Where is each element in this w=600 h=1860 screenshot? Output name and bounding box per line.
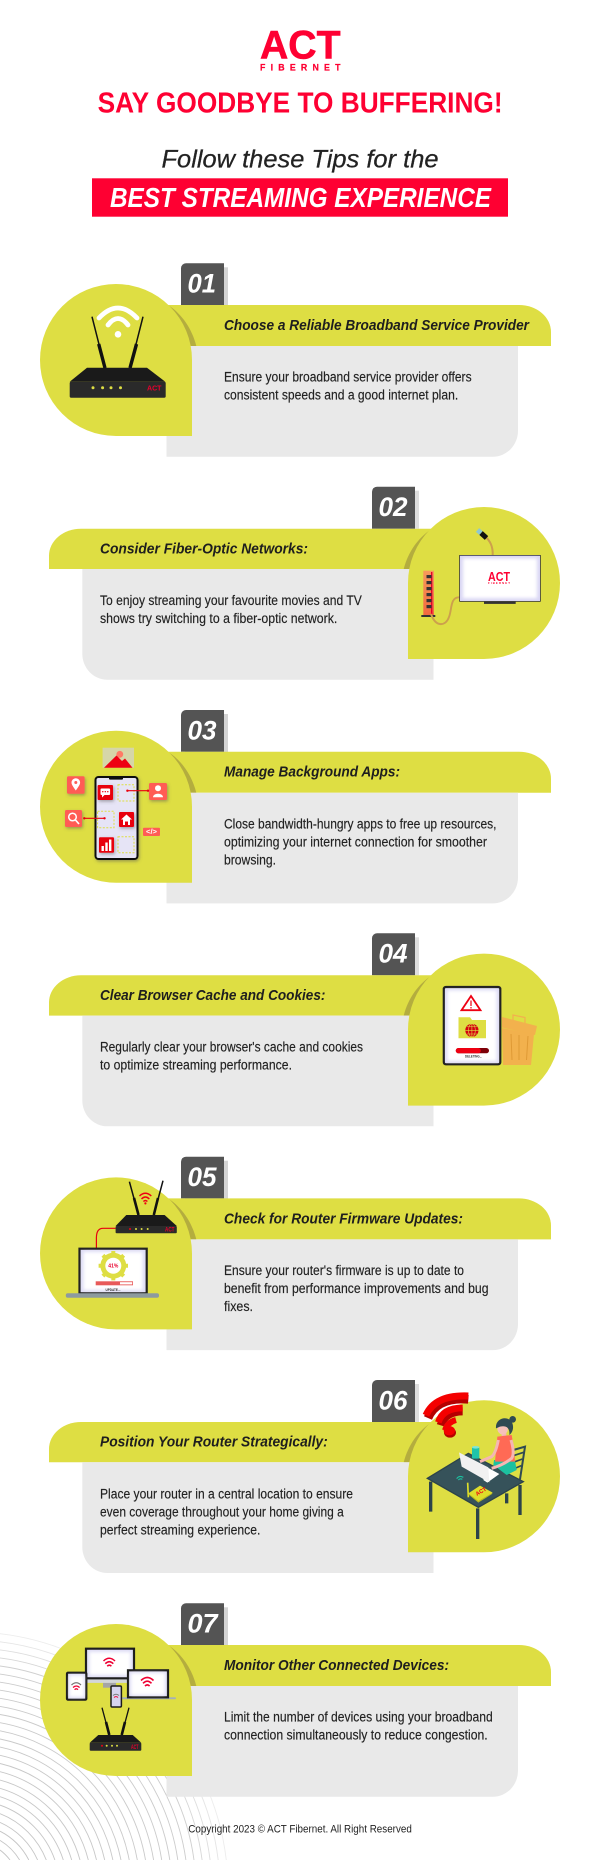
body panel 05: Ensure your router's firmware is up to date to bbox=[224, 1263, 464, 1278]
logo: ACT Fibernet: ACT bbox=[260, 23, 340, 67]
icon circle 01 bbox=[40, 284, 192, 436]
heading bar 02: Consider Fiber-Optic Networks: bbox=[100, 540, 308, 557]
icon: router updating laptop: UPDATE... bbox=[106, 1287, 120, 1292]
number badge 03 bbox=[181, 710, 224, 752]
icon circle 03 bbox=[40, 731, 192, 883]
icon circle 04 bbox=[408, 954, 560, 1106]
number badge 01: 01 bbox=[188, 269, 216, 299]
panel: tip 06 bbox=[49, 1380, 560, 1573]
heading bar 03 bbox=[150, 752, 551, 793]
heading bar 04 bbox=[49, 975, 450, 1016]
number badge 06: 06 bbox=[378, 1385, 408, 1415]
icon circle 05 bbox=[40, 1177, 192, 1329]
icon: tablet and trash can bbox=[444, 987, 537, 1065]
body panel 03 bbox=[166, 793, 518, 903]
heading bar 07 bbox=[150, 1645, 551, 1686]
icon: phone with apps bbox=[65, 748, 167, 859]
icon: woman at table with wifi bbox=[426, 1396, 525, 1539]
body panel 03: optimizing your internet connection for smoother bbox=[224, 834, 487, 849]
icon: router updating laptop: ACT bbox=[165, 1228, 175, 1234]
body panel 01 bbox=[166, 346, 518, 457]
body panel 07: Limit the number of devices using your broadband bbox=[224, 1710, 493, 1725]
number badge 02: 02 bbox=[378, 492, 408, 522]
icon: router with wifi bbox=[70, 308, 166, 398]
icon: router with wifi: ACT bbox=[147, 384, 162, 393]
number badge 05 bbox=[181, 1157, 224, 1198]
icon: connected devices and router bbox=[67, 1649, 176, 1751]
icon circle 02 bbox=[408, 507, 560, 659]
heading bar 06 bbox=[49, 1422, 450, 1462]
number badge 02 bbox=[372, 487, 415, 529]
panel: tip 07 bbox=[40, 1603, 551, 1797]
banner: best streaming experience: BEST STREAMING EXPERIENCE bbox=[110, 182, 492, 213]
subtitle: Follow these Tips for the bbox=[162, 146, 438, 174]
body panel 05 bbox=[166, 1239, 518, 1350]
body panel 06 bbox=[82, 1462, 434, 1573]
heading bar 01: Choose a Reliable Broadband Service Provider bbox=[224, 317, 530, 334]
body panel 04: to optimize streaming performance. bbox=[100, 1058, 292, 1073]
copyright footer: Copyright 2023 © ACT Fibernet. All Right Reserved bbox=[188, 1824, 412, 1836]
icon: connected devices and router: ACT bbox=[131, 1745, 139, 1751]
number badge 04: 04 bbox=[378, 939, 408, 969]
body panel 02: To enjoy streaming your favourite movies and TV bbox=[100, 593, 362, 608]
icon circle 07 bbox=[40, 1624, 192, 1776]
icon: phone with apps: </> bbox=[146, 829, 157, 836]
icon: TV and fiber cable: FIBERNET bbox=[488, 581, 510, 585]
body panel 06: perfect streaming experience. bbox=[100, 1522, 260, 1537]
title: SAY GOODBYE TO BUFFERING! bbox=[98, 87, 503, 119]
panel: tip 02 bbox=[49, 487, 560, 680]
number badge 07: 07 bbox=[188, 1609, 219, 1639]
heading bar 07: Monitor Other Connected Devices: bbox=[224, 1657, 449, 1674]
icon: TV and fiber cable: ACT bbox=[488, 570, 510, 584]
heading bar 05: Check for Router Firmware Updates: bbox=[224, 1210, 463, 1227]
panel: tip 03 bbox=[40, 710, 551, 903]
icon: router updating laptop bbox=[66, 1181, 177, 1298]
icon: woman at table with wifi: ACT bbox=[475, 1486, 488, 1498]
body panel 05: benefit from performance improvements and bug bbox=[224, 1281, 488, 1296]
body panel 02: shows try switching to a fiber-optic network. bbox=[100, 611, 337, 626]
heading bar 03: Manage Background Apps: bbox=[224, 764, 400, 781]
panel: tip 04 bbox=[49, 933, 560, 1126]
heading bar 05 bbox=[150, 1198, 551, 1239]
icon: TV and fiber cable bbox=[421, 530, 541, 624]
body panel 06: Place your router in a central location to ensure bbox=[100, 1486, 353, 1501]
panel: tip 05 bbox=[40, 1157, 551, 1350]
body panel 06: even coverage throughout your home giving a bbox=[100, 1504, 344, 1519]
icon: tablet and trash can: DELETING... bbox=[465, 1054, 482, 1058]
body panel 03: Close bandwidth-hungry apps to free up resources, bbox=[224, 816, 496, 831]
heading bar 06: Position Your Router Strategically: bbox=[100, 1434, 328, 1451]
icon circle 06 bbox=[408, 1400, 560, 1552]
number badge 04 bbox=[372, 933, 415, 975]
body panel 07: connection simultaneously to reduce congestion. bbox=[224, 1728, 488, 1743]
number badge 06 bbox=[372, 1380, 415, 1422]
number badge 05: 05 bbox=[188, 1162, 217, 1192]
body panel 05: fixes. bbox=[224, 1299, 253, 1314]
body panel 07 bbox=[166, 1686, 518, 1797]
body panel 04 bbox=[82, 1016, 434, 1126]
body panel 02 bbox=[82, 569, 434, 680]
icon: router updating laptop: 41% bbox=[108, 1264, 119, 1270]
number badge 01 bbox=[181, 263, 224, 305]
number badge 03: 03 bbox=[188, 715, 216, 745]
body panel 03: browsing. bbox=[224, 852, 276, 867]
number badge 07 bbox=[181, 1603, 224, 1645]
body panel 01: Ensure your broadband service provider offers bbox=[224, 370, 472, 385]
logo: ACT Fibernet: FIBERNET bbox=[260, 63, 341, 73]
heading bar 01 bbox=[150, 305, 551, 346]
heading bar 02 bbox=[49, 529, 450, 569]
body panel 01: consistent speeds and a good internet plan. bbox=[224, 388, 458, 403]
heading bar 04: Clear Browser Cache and Cookies: bbox=[100, 987, 325, 1004]
body panel 04: Regularly clear your browser's cache and cookies bbox=[100, 1040, 363, 1055]
panel: tip 01 bbox=[40, 263, 551, 457]
